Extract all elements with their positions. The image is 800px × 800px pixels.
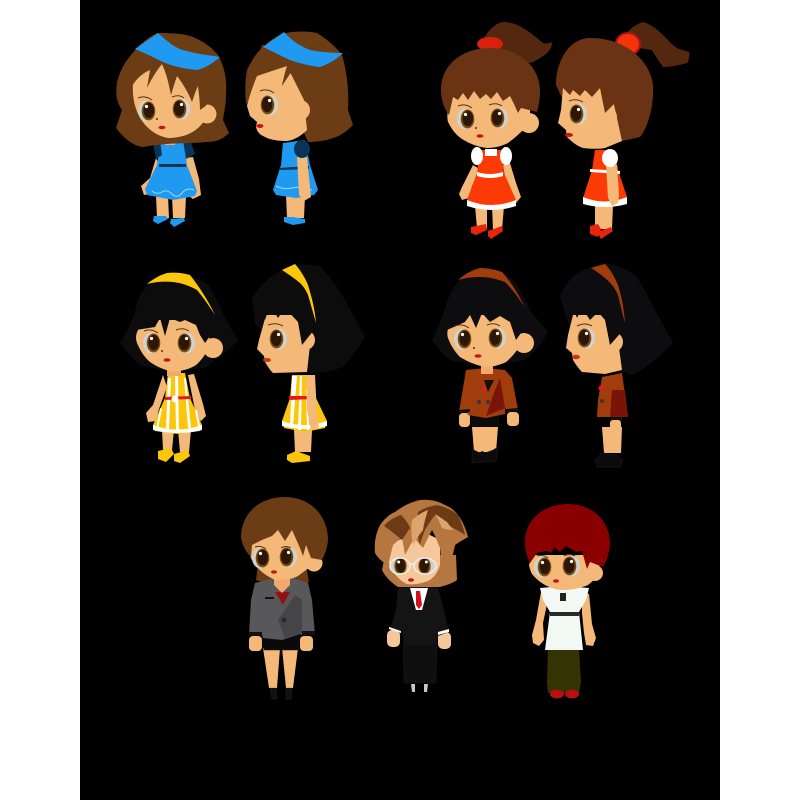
skirt — [471, 412, 499, 426]
shoes — [411, 684, 428, 692]
bangs — [447, 282, 530, 340]
dark curls — [384, 505, 465, 545]
bangs — [132, 45, 220, 110]
hair — [241, 497, 328, 560]
jacket — [597, 373, 628, 417]
legs and shoes — [153, 196, 186, 227]
sleeve — [294, 140, 310, 158]
eyes — [391, 557, 434, 575]
eye and mouth — [565, 100, 587, 137]
bangs — [568, 285, 632, 345]
dress — [467, 150, 516, 210]
neck — [165, 136, 175, 145]
face — [558, 88, 622, 149]
ponytail — [627, 22, 689, 67]
character: blue dress girl, side — [245, 32, 353, 225]
sleeve — [602, 149, 618, 167]
button — [600, 399, 604, 403]
legs and shoes — [287, 430, 312, 463]
blouse — [275, 592, 290, 605]
shoes — [550, 690, 579, 698]
hair — [525, 504, 610, 569]
character: yellow dress girl, front — [120, 273, 238, 463]
character: red dress girl, front — [441, 22, 552, 239]
legs and shoes — [263, 648, 298, 699]
face — [257, 315, 310, 373]
arms — [459, 163, 521, 203]
eyes and mouth — [454, 324, 506, 358]
ear — [514, 333, 534, 353]
neck — [481, 362, 493, 374]
brooch — [598, 386, 604, 390]
back hair — [382, 555, 457, 587]
headband — [147, 273, 215, 315]
eyes and mouth — [252, 546, 297, 574]
brooch — [482, 387, 486, 391]
bangs — [563, 70, 618, 113]
back hair — [256, 560, 309, 585]
dress — [583, 150, 627, 207]
belt — [165, 396, 191, 402]
hair — [252, 265, 365, 373]
character: red-haired girl in white top — [525, 504, 610, 698]
dress — [153, 373, 202, 434]
top — [540, 586, 589, 650]
ear — [290, 100, 310, 120]
character: man in black suit with glasses — [375, 500, 468, 692]
hair — [245, 32, 353, 142]
eyes and mouth — [143, 329, 195, 362]
ear — [587, 565, 603, 581]
bangs — [247, 45, 315, 102]
eye and mouth — [256, 90, 278, 128]
scrunchie — [477, 37, 503, 51]
shirt and tie — [410, 588, 428, 610]
belt — [550, 612, 579, 616]
eye and mouth — [263, 324, 287, 362]
character: yellow dress girl, side — [252, 264, 365, 463]
ponytail — [483, 22, 552, 63]
legs and shoes — [471, 206, 504, 239]
headband — [282, 264, 316, 323]
eyes and mouth — [138, 96, 190, 129]
headband — [458, 268, 525, 308]
dress — [145, 143, 197, 200]
face — [566, 315, 622, 374]
neck — [274, 575, 290, 593]
legs and shoes — [590, 205, 613, 239]
hair — [432, 268, 548, 367]
dress — [273, 140, 318, 198]
face — [388, 530, 440, 584]
bangs — [258, 285, 322, 345]
legs and shoes — [158, 430, 191, 463]
headband — [135, 33, 220, 70]
jacket — [249, 578, 315, 640]
collar — [560, 593, 566, 601]
ear — [306, 554, 322, 572]
character: blue dress girl, front — [116, 33, 229, 227]
face — [136, 320, 210, 372]
character: brown jacket girl, front — [432, 268, 548, 463]
arms — [141, 157, 201, 199]
character: brown jacket girl, side — [560, 263, 673, 467]
hair — [120, 273, 238, 372]
face — [247, 66, 307, 141]
hair — [556, 38, 653, 141]
ear — [597, 107, 617, 127]
hair — [116, 33, 229, 147]
ear — [203, 338, 223, 358]
belt — [289, 396, 315, 400]
character: woman in grey suit — [241, 497, 328, 699]
hair — [441, 48, 540, 115]
eyes and mouth — [457, 104, 508, 138]
face — [529, 555, 600, 590]
arms — [146, 374, 206, 422]
jacket — [459, 368, 518, 418]
trousers — [547, 648, 581, 693]
suit — [390, 586, 449, 645]
ear — [198, 104, 216, 124]
face — [447, 85, 530, 148]
ear — [603, 332, 623, 352]
hands — [387, 630, 451, 649]
dress — [282, 375, 327, 432]
glasses — [390, 558, 436, 574]
headband — [591, 264, 625, 323]
eye and mouth — [572, 324, 595, 359]
character: red dress girl, side — [556, 22, 689, 239]
light curls — [411, 510, 453, 545]
eyes and mouth — [534, 554, 580, 583]
neck — [167, 368, 181, 376]
hair — [560, 263, 673, 375]
face — [250, 530, 314, 580]
sleeves — [471, 147, 512, 165]
hands — [459, 412, 519, 427]
arm — [297, 157, 311, 201]
hand — [610, 420, 621, 432]
mouth — [408, 578, 414, 582]
headband — [263, 32, 343, 67]
legs and shoes — [595, 427, 622, 467]
ear — [295, 330, 315, 350]
skirt — [262, 634, 300, 650]
trousers — [403, 643, 437, 683]
face — [447, 315, 520, 367]
arms — [532, 592, 596, 646]
arm — [606, 165, 619, 206]
hands — [249, 636, 313, 651]
jacket button — [282, 618, 286, 622]
face — [133, 62, 208, 138]
bangs — [136, 285, 218, 343]
arm — [306, 375, 319, 430]
legs and shoes — [284, 195, 305, 225]
ear — [519, 113, 539, 133]
scrunchie — [616, 33, 640, 55]
hair — [375, 500, 468, 570]
legs and shoes — [472, 427, 498, 463]
buttons — [477, 400, 490, 404]
